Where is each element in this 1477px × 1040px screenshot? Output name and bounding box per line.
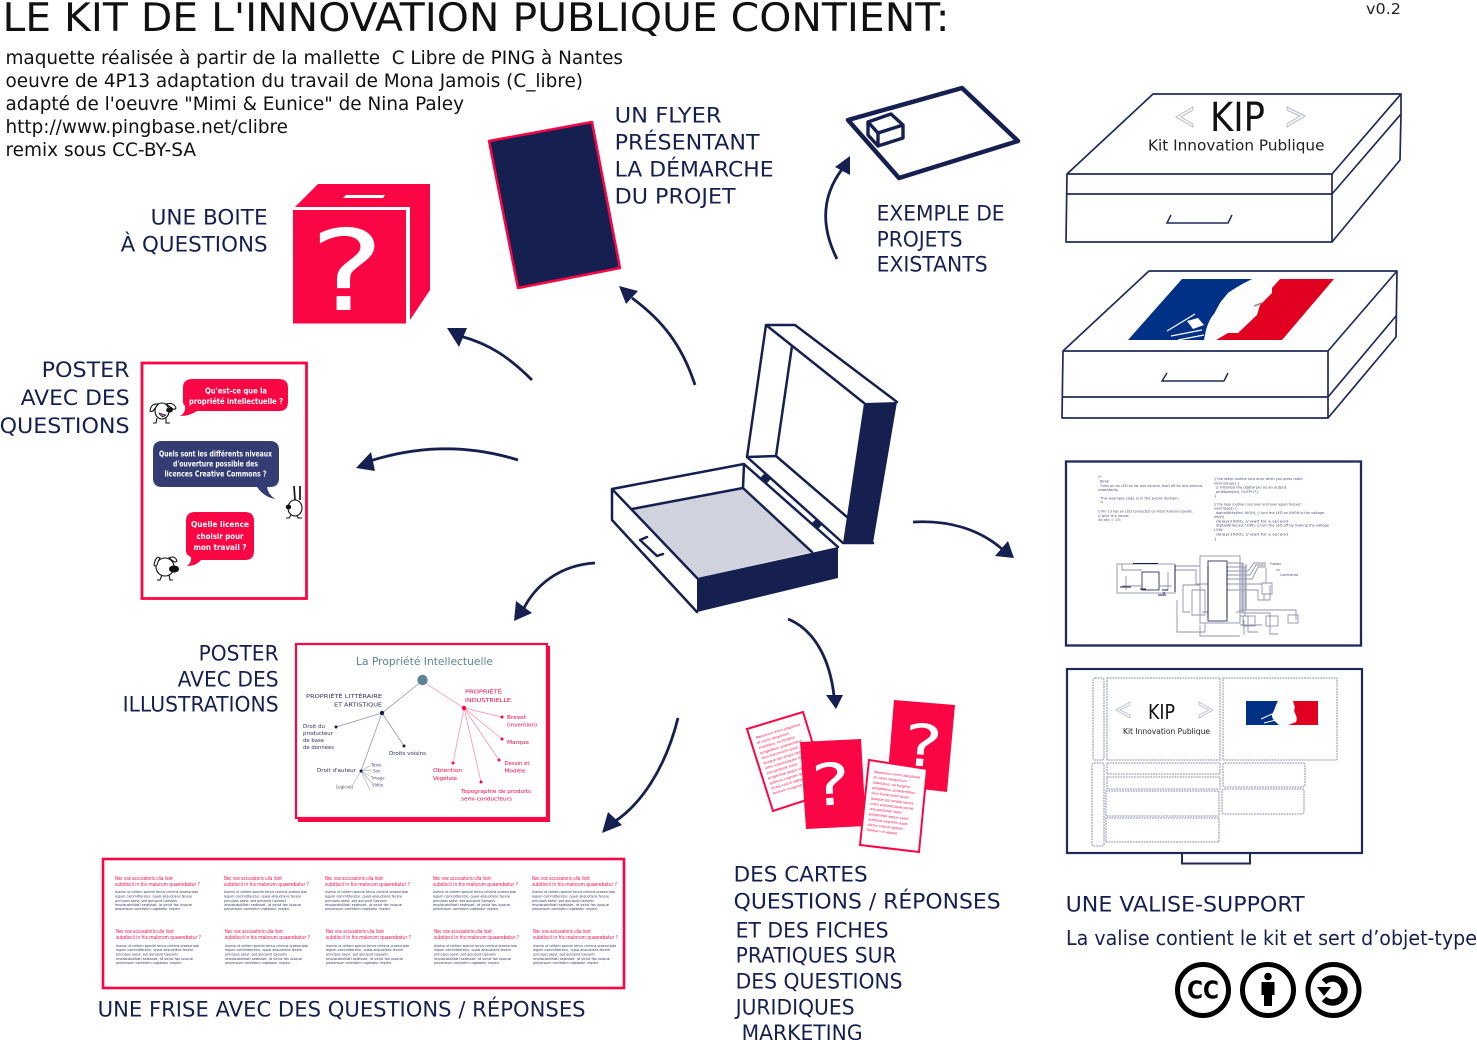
answer sheet back: et variis sanguinum [757, 731, 791, 745]
code right: digitalWrite(led, HIGH); // turn the LED on (HIGH is the voltage [1216, 511, 1325, 515]
answer sheet front [860, 760, 927, 852]
speech bubble 3: Quelle licence [191, 520, 250, 529]
branch labels: industrial: Brevet [507, 715, 526, 721]
branch labels: literary: de données [303, 744, 334, 751]
label: suitcase support: UNE VALISE-SUPPORT [1066, 892, 1305, 916]
answer sheet front: infantibus, ne fungitur [873, 781, 911, 789]
poster: questions [142, 363, 306, 598]
cards and sheets [747, 700, 955, 852]
label: poster with illustrations: POSTER [199, 641, 279, 665]
frieze block 7: perpensum confestim urgebatur impleri. [225, 961, 291, 965]
frieze block 5: principes saevi: sed quicquid Caesaris [532, 899, 594, 903]
tree branches [336, 681, 502, 790]
icon: creative commons SA [1308, 964, 1359, 1016]
frieze block 4: implacabilitati sedisset, id velut fas iusque [433, 903, 511, 907]
frieze block 5: perpensum confestim urgebatur impleri. [532, 907, 598, 911]
frieze block 6: implacabilitati sedisset, id velut fas iusque [116, 957, 194, 961]
frieze block 8: principes saevi: sed quicquid Caesaris [326, 952, 388, 956]
branch labels: literary: ET ARTISTIQUE [334, 702, 383, 708]
box with KIP lid [1066, 94, 1401, 242]
label: question box: UNE BOITE [151, 205, 268, 229]
code left: // give it a name: [1098, 514, 1129, 518]
code right: } [1214, 537, 1216, 541]
icon: red question box: ? [310, 206, 384, 337]
frieze block 6: perpensum confestim urgebatur impleri. [116, 961, 182, 965]
arrow: question box [447, 328, 532, 380]
frieze block 2: implacabilitati sedisset, id velut fas iusque [224, 903, 302, 907]
frieze block 10: Nec vox accusatoris ulla licet [533, 929, 591, 935]
answer sheet back: divo transmarini quod [761, 745, 798, 760]
arrow: sheet [826, 156, 850, 259]
frieze block 4: legum committeretur, quasi aliquotiens fecere [433, 894, 511, 898]
branch labels: industrial [433, 688, 537, 802]
frieze block 8: Asenio ut celtem speciei tenus crimina praescripto [326, 944, 410, 948]
frieze block 6: Asenio ut celtem speciei tenus crimina praescripto [116, 944, 200, 948]
frieze block 5: legum committeretur, quasi aliquotiens fecere [532, 894, 610, 898]
frieze block 3: legum committeretur, quasi aliquotiens fecere [325, 894, 403, 898]
answer sheet front: publicas cognatis quod [868, 817, 907, 826]
question card left: ? [810, 751, 852, 820]
frieze block 9: perpensum confestim urgebatur impleri. [434, 961, 500, 965]
circuit annotations: Fusible [1270, 562, 1281, 566]
arrow: suitcase support [913, 522, 1014, 558]
code left: Blink [1100, 480, 1110, 484]
frieze block 1: Asenio ut celtem speciei tenus crimina praescripto [115, 890, 199, 894]
frieze block 3 [325, 876, 410, 911]
suitcase open [612, 325, 897, 612]
frieze block 8: legum committeretur, quasi aliquotiens fecere [326, 948, 404, 952]
answer sheet back: quoque ipsi ampla opima [763, 749, 805, 765]
code right: LOW [1214, 528, 1223, 532]
frieze block 9: implacabilitati sedisset, id velut fas iusque [434, 957, 512, 961]
icon: dog 1 [150, 403, 176, 423]
arrow: cards [788, 619, 843, 709]
answer sheet front: dictus calculi agitant. [867, 823, 904, 831]
branch labels: industrial: Modèle [504, 768, 526, 774]
credits text block: maquette réalisée à partir de la mallette C Libre de PING à Nantes [6, 47, 623, 69]
frieze block 4: subdiscii in his malorum quaerebatur ? [433, 882, 518, 888]
frieze block 9 [434, 929, 519, 965]
answer sheet front: et variis sanguinum [873, 775, 908, 783]
answer sheet back: ana perdurat malis [766, 762, 798, 775]
label: poster with illustrations [123, 641, 279, 716]
frieze block 5 [532, 876, 617, 911]
frieze block 9: principes saevi: sed quicquid Caesaris [434, 952, 496, 956]
label: poster with questions [0, 358, 130, 438]
frieze block 3: principes saevi: sed quicquid Caesaris [325, 899, 387, 903]
code left: // Pin 13 has an LED connected on most Arduino boards. [1098, 510, 1193, 514]
branch labels: literary: Image [372, 776, 385, 780]
frieze block 8: Nec vox accusatoris ulla licet [326, 929, 384, 935]
label: example projects [877, 201, 1005, 276]
box with KIP lid: Kit Innovation Publique [1148, 136, 1324, 154]
frieze block 7 [225, 929, 310, 965]
speech bubble 2: licences Creative Commons ? [164, 470, 267, 478]
label: cards and sheets: JURIDIQUES [734, 995, 855, 1019]
heading: La Propriété Intellectuelle [356, 656, 493, 668]
label: cards and sheets [734, 862, 1001, 1040]
frieze block 8 [326, 929, 411, 965]
answer sheet front: Maecenum enim adoptione [874, 770, 920, 780]
frieze block 8: subdiscii in his malorum quaerebatur ? [326, 935, 411, 941]
code left [1098, 475, 1203, 522]
frieze block 9: Nec vox accusatoris ulla licet [434, 929, 492, 935]
frieze block 2: Asenio ut celtem speciei tenus crimina praescripto [224, 890, 308, 894]
panel: code and circuit [1066, 462, 1361, 646]
label: poster with questions: QUESTIONS [0, 414, 130, 438]
frieze block 5: Nec vox accusatoris ulla licet [532, 876, 590, 882]
answer sheet front: divo transmarini quod [871, 791, 909, 800]
branch labels: literary: Texte [370, 762, 382, 768]
label: cards and sheets: PRATIQUES SUR [736, 943, 897, 967]
answer sheet front: progenitae aequo velut [869, 812, 909, 821]
frieze block 3: Nec vox accusatoris ulla licet [325, 876, 383, 882]
frieze block 3: Asenio ut celtem speciei tenus crimina praescripto [325, 890, 409, 894]
speech bubble 1: propriété intellectuelle ? [189, 396, 283, 406]
label: poster with illustrations: ILLUSTRATIONS [123, 692, 279, 716]
frieze block 10: principes saevi: sed quicquid Caesaris [533, 952, 595, 956]
frieze block 2 [224, 876, 309, 911]
box with French flag logo [1062, 271, 1397, 418]
label: flyer [615, 103, 774, 208]
credits text block [6, 47, 623, 161]
branch labels: industrial: Dessin et [504, 761, 530, 767]
frieze block 1: legum committeretur, quasi aliquotiens fecere [115, 894, 193, 898]
code right: } [1214, 494, 1216, 498]
label: example projects: PROJETS [877, 227, 963, 251]
code right: level) [1214, 515, 1225, 519]
label: flyer: PRÉSENTANT [615, 129, 760, 154]
code right: void loop() { [1214, 506, 1237, 510]
KIP lid artwork: Kit Innovation Publique [1123, 727, 1210, 736]
speech bubble 3 [186, 512, 254, 566]
circuit annotations [1270, 562, 1298, 577]
frieze block 2: Nec vox accusatoris ulla licet [224, 876, 282, 882]
branch labels: industrial: Topographie de produits [460, 789, 531, 795]
answer sheet back: Maecenum enim adoptione [755, 723, 801, 740]
label: frieze: UNE FRISE AVEC DES QUESTIONS / RÉPONSES [98, 996, 586, 1021]
label: poster with illustrations: AVEC DES [178, 667, 279, 691]
flag logo [1246, 701, 1318, 725]
poster: intellectual property tree [296, 644, 548, 820]
frieze block 1: implacabilitati sedisset, id velut fas iusque [115, 903, 193, 907]
label: flyer: DU PROJET [615, 184, 736, 208]
branch labels: literary: Droit du [303, 724, 325, 730]
frieze block 1: Nec vox accusatoris ulla licet [115, 876, 173, 882]
question card right: ? [901, 712, 945, 782]
die-cut outlines [1092, 678, 1337, 846]
frieze block 6: Nec vox accusatoris ulla licet [116, 929, 174, 935]
frieze block 5: subdiscii in his malorum quaerebatur ? [532, 882, 617, 888]
branch labels: industrial: Obtention [433, 768, 462, 774]
answer sheet back: dictus calculi agitant. [771, 776, 806, 791]
frieze block 6: subdiscii in his malorum quaerebatur ? [116, 935, 201, 941]
code left: Turns on an LED on for one second, then off for one second, [1099, 484, 1203, 488]
frieze block 6 [116, 929, 201, 965]
label: question box: À QUESTIONS [121, 231, 268, 256]
code left: */ [1100, 500, 1104, 504]
branch labels: literary: Vidéo [372, 782, 384, 788]
branch labels: literary: Droit d'auteur [317, 768, 357, 774]
frieze block 4: Nec vox accusatoris ulla licet [433, 876, 491, 882]
answer sheet front: prögedibus, praesentibus [872, 786, 915, 795]
credits text block: oeuvre de 4P13 adaptation du travail de Mona Jamois (C_libre) [6, 70, 583, 92]
label: cards and sheets: DES QUESTIONS [736, 969, 903, 993]
answer sheet back [747, 712, 828, 811]
frieze block 7: legum committeretur, quasi aliquotiens fecere [225, 948, 303, 952]
frieze block 10: perpensum confestim urgebatur impleri. [533, 961, 599, 965]
arrow: frieze [602, 718, 678, 833]
branch labels: literary: de base [303, 738, 325, 744]
label: example projects: EXISTANTS [877, 252, 988, 276]
answer sheet back: progenitae aequo velut [768, 765, 807, 781]
branch labels: industrial: (invention) [507, 722, 537, 728]
icon: dog 2 [154, 557, 178, 580]
frieze block 2: subdiscii in his malorum quaerebatur ? [224, 882, 309, 888]
code left: repeatedly. [1098, 488, 1119, 492]
flyer [489, 122, 620, 288]
panel: suitcase template [1067, 669, 1362, 864]
frieze block 7: implacabilitati sedisset, id velut fas iusque [225, 957, 303, 961]
icon: red question box [293, 184, 430, 337]
frieze block 5: implacabilitati sedisset, id velut fas iusque [532, 903, 610, 907]
frieze block 10: implacabilitati sedisset, id velut fas iusque [533, 957, 611, 961]
answer sheet back: prögedibus, praesentibus [760, 739, 802, 755]
label: poster with questions: POSTER [42, 358, 130, 382]
code right: delay(1000); // wait for a second [1216, 532, 1288, 536]
speech bubble 3: mon travail ? [194, 543, 247, 552]
frieze block 3: implacabilitati sedisset, id velut fas iusque [325, 903, 403, 907]
KIP lid artwork: KIP [1148, 700, 1175, 724]
branch labels: literary: PROPRIÉTÉ LITTÉRAIRE [306, 692, 383, 700]
tree nodes [334, 675, 504, 784]
code right: // the setup routine runs once when you press reset: [1214, 477, 1303, 481]
icon: creative commons BY [1242, 964, 1294, 1016]
answer sheet back: infantibus, ne fungitur [758, 735, 796, 750]
KIP lid artwork [1116, 700, 1213, 736]
code right: digitalWrite(led, LOW); // turn the LED off by making the voltage [1216, 524, 1330, 528]
label: poster with questions: AVEC DES [21, 386, 130, 410]
answer sheet back: fenilium in agione [772, 783, 802, 796]
answer sheet front: fenilium in agione [867, 828, 897, 836]
frieze block 1: subdiscii in his malorum quaerebatur ? [115, 882, 200, 888]
speech bubble 2: Quels sont les différents niveaux [159, 448, 273, 458]
answer sheet front: quoque ipsi ampla opima [871, 796, 914, 806]
label: cards and sheets: ET DES FICHES [736, 918, 889, 942]
label: flyer: UN FLYER [615, 103, 722, 127]
label: cards and sheets: QUESTIONS / RÉPONSES [734, 888, 1001, 913]
frieze block 9: legum committeretur, quasi aliquotiens fecere [434, 948, 512, 952]
frieze block 7: principes saevi: sed quicquid Caesaris [225, 952, 287, 956]
icon: rabbit [286, 486, 302, 518]
arrow: poster questions [356, 449, 518, 471]
label: example projects: EXEMPLE DE [877, 201, 1005, 225]
version label: v0.2 [1366, 0, 1401, 18]
frieze block 8: perpensum confestim urgebatur impleri. [326, 961, 392, 965]
frieze block 6: principes saevi: sed quicquid Caesaris [116, 952, 178, 956]
credits text block: adapté de l'oeuvre "Mimi & Eunice" de Nina Paley [6, 93, 464, 115]
credits text block: remix sous CC-BY-SA [6, 139, 196, 161]
label: cards and sheets: DES CARTES [734, 862, 868, 886]
frieze block 7: subdiscii in his malorum quaerebatur ? [225, 935, 310, 941]
frieze block 9: Asenio ut celtem speciei tenus crimina praescripto [434, 944, 518, 948]
icon: creative commons CC: CC [1187, 976, 1219, 1004]
answer sheet front: urbis subarcesqueo olicet [870, 802, 914, 811]
frieze block 7: Asenio ut celtem speciei tenus crimina praescripto [225, 944, 309, 948]
frieze block 10: Asenio ut celtem speciei tenus crimina praescripto [533, 944, 617, 948]
branch labels: industrial: Végétale [433, 775, 458, 782]
frieze block 4: perpensum confestim urgebatur impleri. [433, 907, 499, 911]
frieze block 6: legum committeretur, quasi aliquotiens fecere [116, 948, 194, 952]
branch labels: industrial: INDUSTRIELLE [465, 698, 512, 704]
question card left [800, 739, 866, 829]
answer sheet front: ana perdurat malis [869, 807, 902, 815]
frieze block 3: perpensum confestim urgebatur impleri. [325, 907, 391, 911]
frieze block 1 [115, 876, 200, 911]
frieze block 10 [533, 929, 618, 965]
frieze block 2: principes saevi: sed quicquid Caesaris [224, 899, 286, 903]
credits text block: http://www.pingbase.net/clibre [6, 116, 288, 138]
code right: void setup() { [1214, 482, 1240, 486]
example project sheet [848, 88, 1018, 178]
code right: pinMode(led, OUTPUT); [1216, 490, 1259, 494]
speech bubble 1: Qu'est-ce que la [205, 386, 267, 396]
frieze block 3: subdiscii in his malorum quaerebatur ? [325, 882, 410, 888]
branch labels: literary: producteur [303, 731, 334, 737]
speech bubble 2: d'ouverture possible des [173, 460, 258, 468]
label: question box [121, 205, 268, 256]
answer sheet back: urbis subarcesqueo olicet [764, 754, 808, 770]
frieze block 1: perpensum confestim urgebatur impleri. [115, 907, 181, 911]
frieze block 10: legum committeretur, quasi aliquotiens fecere [533, 948, 611, 952]
frieze block 1: principes saevi: sed quicquid Caesaris [115, 899, 177, 903]
branch labels: industrial: PROPRIÉTÉ [465, 688, 503, 696]
code right: // initialize the digital pin as an output. [1216, 486, 1287, 490]
arrow: flyer [619, 286, 695, 385]
frieze block 8: implacabilitati sedisset, id velut fas iusque [326, 957, 404, 961]
speech bubble 3: choisir pour [196, 532, 244, 541]
code right: delay(1000); // wait for a second [1216, 520, 1288, 524]
frieze block 4 [433, 876, 518, 911]
frieze block 2: legum committeretur, quasi aliquotiens fecere [224, 894, 302, 898]
code left: This example code is in the public domain. [1099, 496, 1179, 500]
code left: int led = 13; [1098, 518, 1121, 522]
branch labels: literary: Logiciels [336, 784, 353, 790]
arrow: poster illustrations [514, 563, 595, 621]
answer sheet back: publicas cognatis quod [769, 770, 808, 786]
frieze: questions and answers [103, 859, 624, 988]
question card right [887, 700, 955, 792]
branch labels: literary: Son [373, 768, 381, 774]
branch labels: industrial: Marque [507, 740, 530, 746]
code right: // the loop routine runs over and over again forever: [1214, 502, 1302, 506]
speech bubble 2 [153, 441, 279, 499]
speech bubble 1 [180, 379, 288, 416]
frieze block 4: Asenio ut celtem speciei tenus crimina praescripto [433, 890, 517, 894]
frieze block 9: subdiscii in his malorum quaerebatur ? [434, 935, 519, 941]
frieze block 10: subdiscii in his malorum quaerebatur ? [533, 935, 618, 941]
frieze block 2: perpensum confestim urgebatur impleri. [224, 907, 290, 911]
branch labels: industrial: semi-conducteurs [461, 796, 512, 802]
frieze block 5: Asenio ut celtem speciei tenus crimina praescripto [532, 890, 616, 894]
circuit diagram [1117, 556, 1298, 636]
code right [1214, 477, 1330, 541]
frieze block 4: principes saevi: sed quicquid Caesaris [433, 899, 495, 903]
icon: creative commons CC [1178, 964, 1228, 1016]
branch labels: literary: Droits voisins [389, 751, 426, 757]
circuit annotations: Commande [1280, 573, 1298, 577]
label: flyer: LA DÉMARCHE [615, 156, 774, 181]
frieze block 7: Nec vox accusatoris ulla licet [225, 929, 283, 935]
box with KIP lid: KIP [1210, 95, 1265, 141]
code left: /* [1098, 475, 1101, 479]
branch labels: literary [303, 692, 426, 790]
